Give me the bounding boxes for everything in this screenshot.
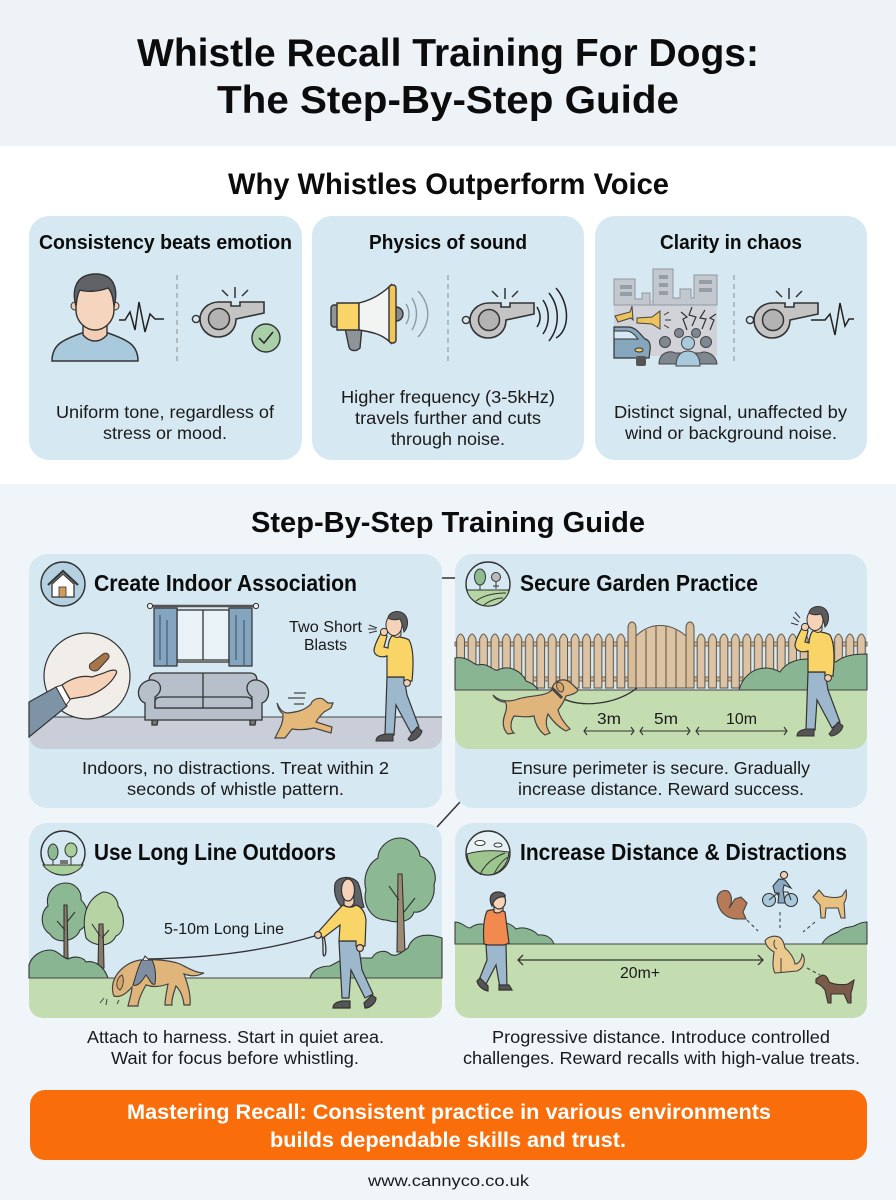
step heading: Secure Garden Practice	[520, 570, 758, 596]
step text: Attach to harness. Start in quiet area.	[87, 1027, 384, 1047]
dashed distraction lines	[747, 912, 820, 975]
dog on lead	[493, 680, 637, 735]
card text: Distinct signal, unaffected by	[614, 402, 847, 422]
icon: whistle	[192, 287, 264, 337]
brown dog	[816, 975, 854, 1003]
step text	[82, 758, 389, 799]
person holding line	[315, 877, 376, 1008]
card text: Higher frequency (3-5kHz)	[341, 387, 555, 407]
callout banner: Mastering Recall: Consistent practice in various environments	[127, 1101, 771, 1124]
icon: garden	[466, 562, 510, 606]
squirrel	[717, 891, 747, 919]
distance markers: 3m	[597, 711, 621, 728]
card heading: Physics of sound	[369, 231, 527, 254]
bushes	[455, 654, 867, 690]
card text: wind or background noise.	[624, 423, 837, 443]
person whistling	[795, 606, 843, 736]
step text	[511, 758, 810, 799]
fence	[455, 622, 867, 692]
step heading: Create Indoor Association	[94, 570, 357, 596]
card text: Uniform tone, regardless of	[56, 402, 274, 422]
panel: physics of sound	[312, 216, 584, 460]
footer url: www.cannyco.co.uk	[367, 1173, 530, 1190]
panel: clarity in chaos	[595, 216, 867, 460]
grass	[455, 944, 867, 1018]
person walking, orange top	[477, 892, 512, 991]
card text	[614, 402, 847, 443]
title: The Step-By-Step Guide	[217, 79, 679, 122]
step text: increase distance. Reward success.	[518, 779, 804, 799]
card text	[341, 387, 555, 449]
panel: step 4 increase distance and distractions	[455, 823, 867, 1068]
step text: challenges. Reward recalls with high-value treats.	[463, 1048, 860, 1068]
distance markers	[584, 711, 787, 735]
title	[137, 32, 759, 122]
icon: megaphone	[331, 285, 403, 351]
step heading: Use Long Line Outdoors	[94, 839, 336, 865]
sitting dog	[765, 936, 804, 973]
sniffing dog with harness	[100, 956, 204, 1006]
person whistling	[374, 611, 422, 741]
step text	[463, 1027, 860, 1068]
sofa	[138, 673, 269, 725]
step text: seconds of whistle pattern.	[127, 779, 344, 799]
step text: Indoors, no distractions. Treat within 2	[82, 758, 389, 778]
running dog	[275, 693, 333, 738]
card heading: Consistency beats emotion	[39, 231, 292, 254]
card text: travels further and cuts	[355, 408, 541, 428]
grass	[455, 690, 867, 749]
panel: step 2 secure garden practice	[455, 554, 867, 808]
heading: training guide: Step-By-Step Training Guide	[251, 507, 645, 539]
card text: stress or mood.	[103, 423, 227, 443]
icon: whistle with sound waves	[462, 288, 566, 341]
icon: fields	[466, 831, 510, 875]
card heading: Clarity in chaos	[660, 231, 802, 254]
label: two short blasts: Two Short	[289, 619, 363, 636]
distance arrow: 20m+	[620, 965, 660, 982]
icon: clean signal	[811, 303, 854, 335]
arrow: connector step 1 to 2	[442, 577, 455, 579]
label: long line: 5-10m Long Line	[164, 921, 284, 938]
callout banner	[30, 1090, 867, 1160]
label: two short blasts	[289, 619, 377, 654]
distance markers: 5m	[654, 711, 678, 728]
grass	[29, 978, 442, 1018]
trees	[29, 838, 442, 978]
panel: step 1 create indoor association	[29, 554, 442, 808]
icon: voice wave	[119, 302, 164, 332]
step heading: Increase Distance & Distractions	[520, 839, 847, 865]
arrow: connector step 2 to 3	[437, 802, 460, 827]
cyclist	[762, 871, 798, 906]
icon: park	[41, 831, 85, 875]
icon: noisy city	[614, 269, 717, 366]
distance markers: 10m	[726, 711, 757, 728]
icon: whistle	[746, 288, 818, 338]
long line	[146, 935, 326, 959]
sound waves, grey	[406, 291, 428, 337]
tan dog	[813, 890, 846, 918]
label: two short blasts: Blasts	[304, 637, 347, 654]
step text: Wait for focus before whistling.	[111, 1048, 359, 1068]
icon: person speaking	[52, 274, 138, 361]
panel: step 3 use long line outdoors	[29, 823, 442, 1068]
distance arrow	[518, 955, 763, 982]
step text: Progressive distance. Introduce controlled	[492, 1027, 830, 1047]
step text: Ensure perimeter is secure. Gradually	[511, 758, 810, 778]
panel: consistency beats emotion	[29, 216, 302, 460]
window with curtains	[147, 603, 259, 666]
treat in hand circle	[29, 633, 130, 737]
heading: why whistles: Why Whistles Outperform Voice	[228, 168, 669, 201]
step text	[87, 1027, 384, 1068]
callout banner: builds dependable skills and trust.	[270, 1129, 626, 1152]
card text	[56, 402, 274, 443]
icon: check badge	[252, 324, 280, 352]
icon: house	[41, 562, 85, 606]
card text: through noise.	[391, 429, 505, 449]
floor	[29, 717, 442, 749]
bushes	[455, 922, 867, 944]
title: Whistle Recall Training For Dogs:	[137, 32, 759, 75]
